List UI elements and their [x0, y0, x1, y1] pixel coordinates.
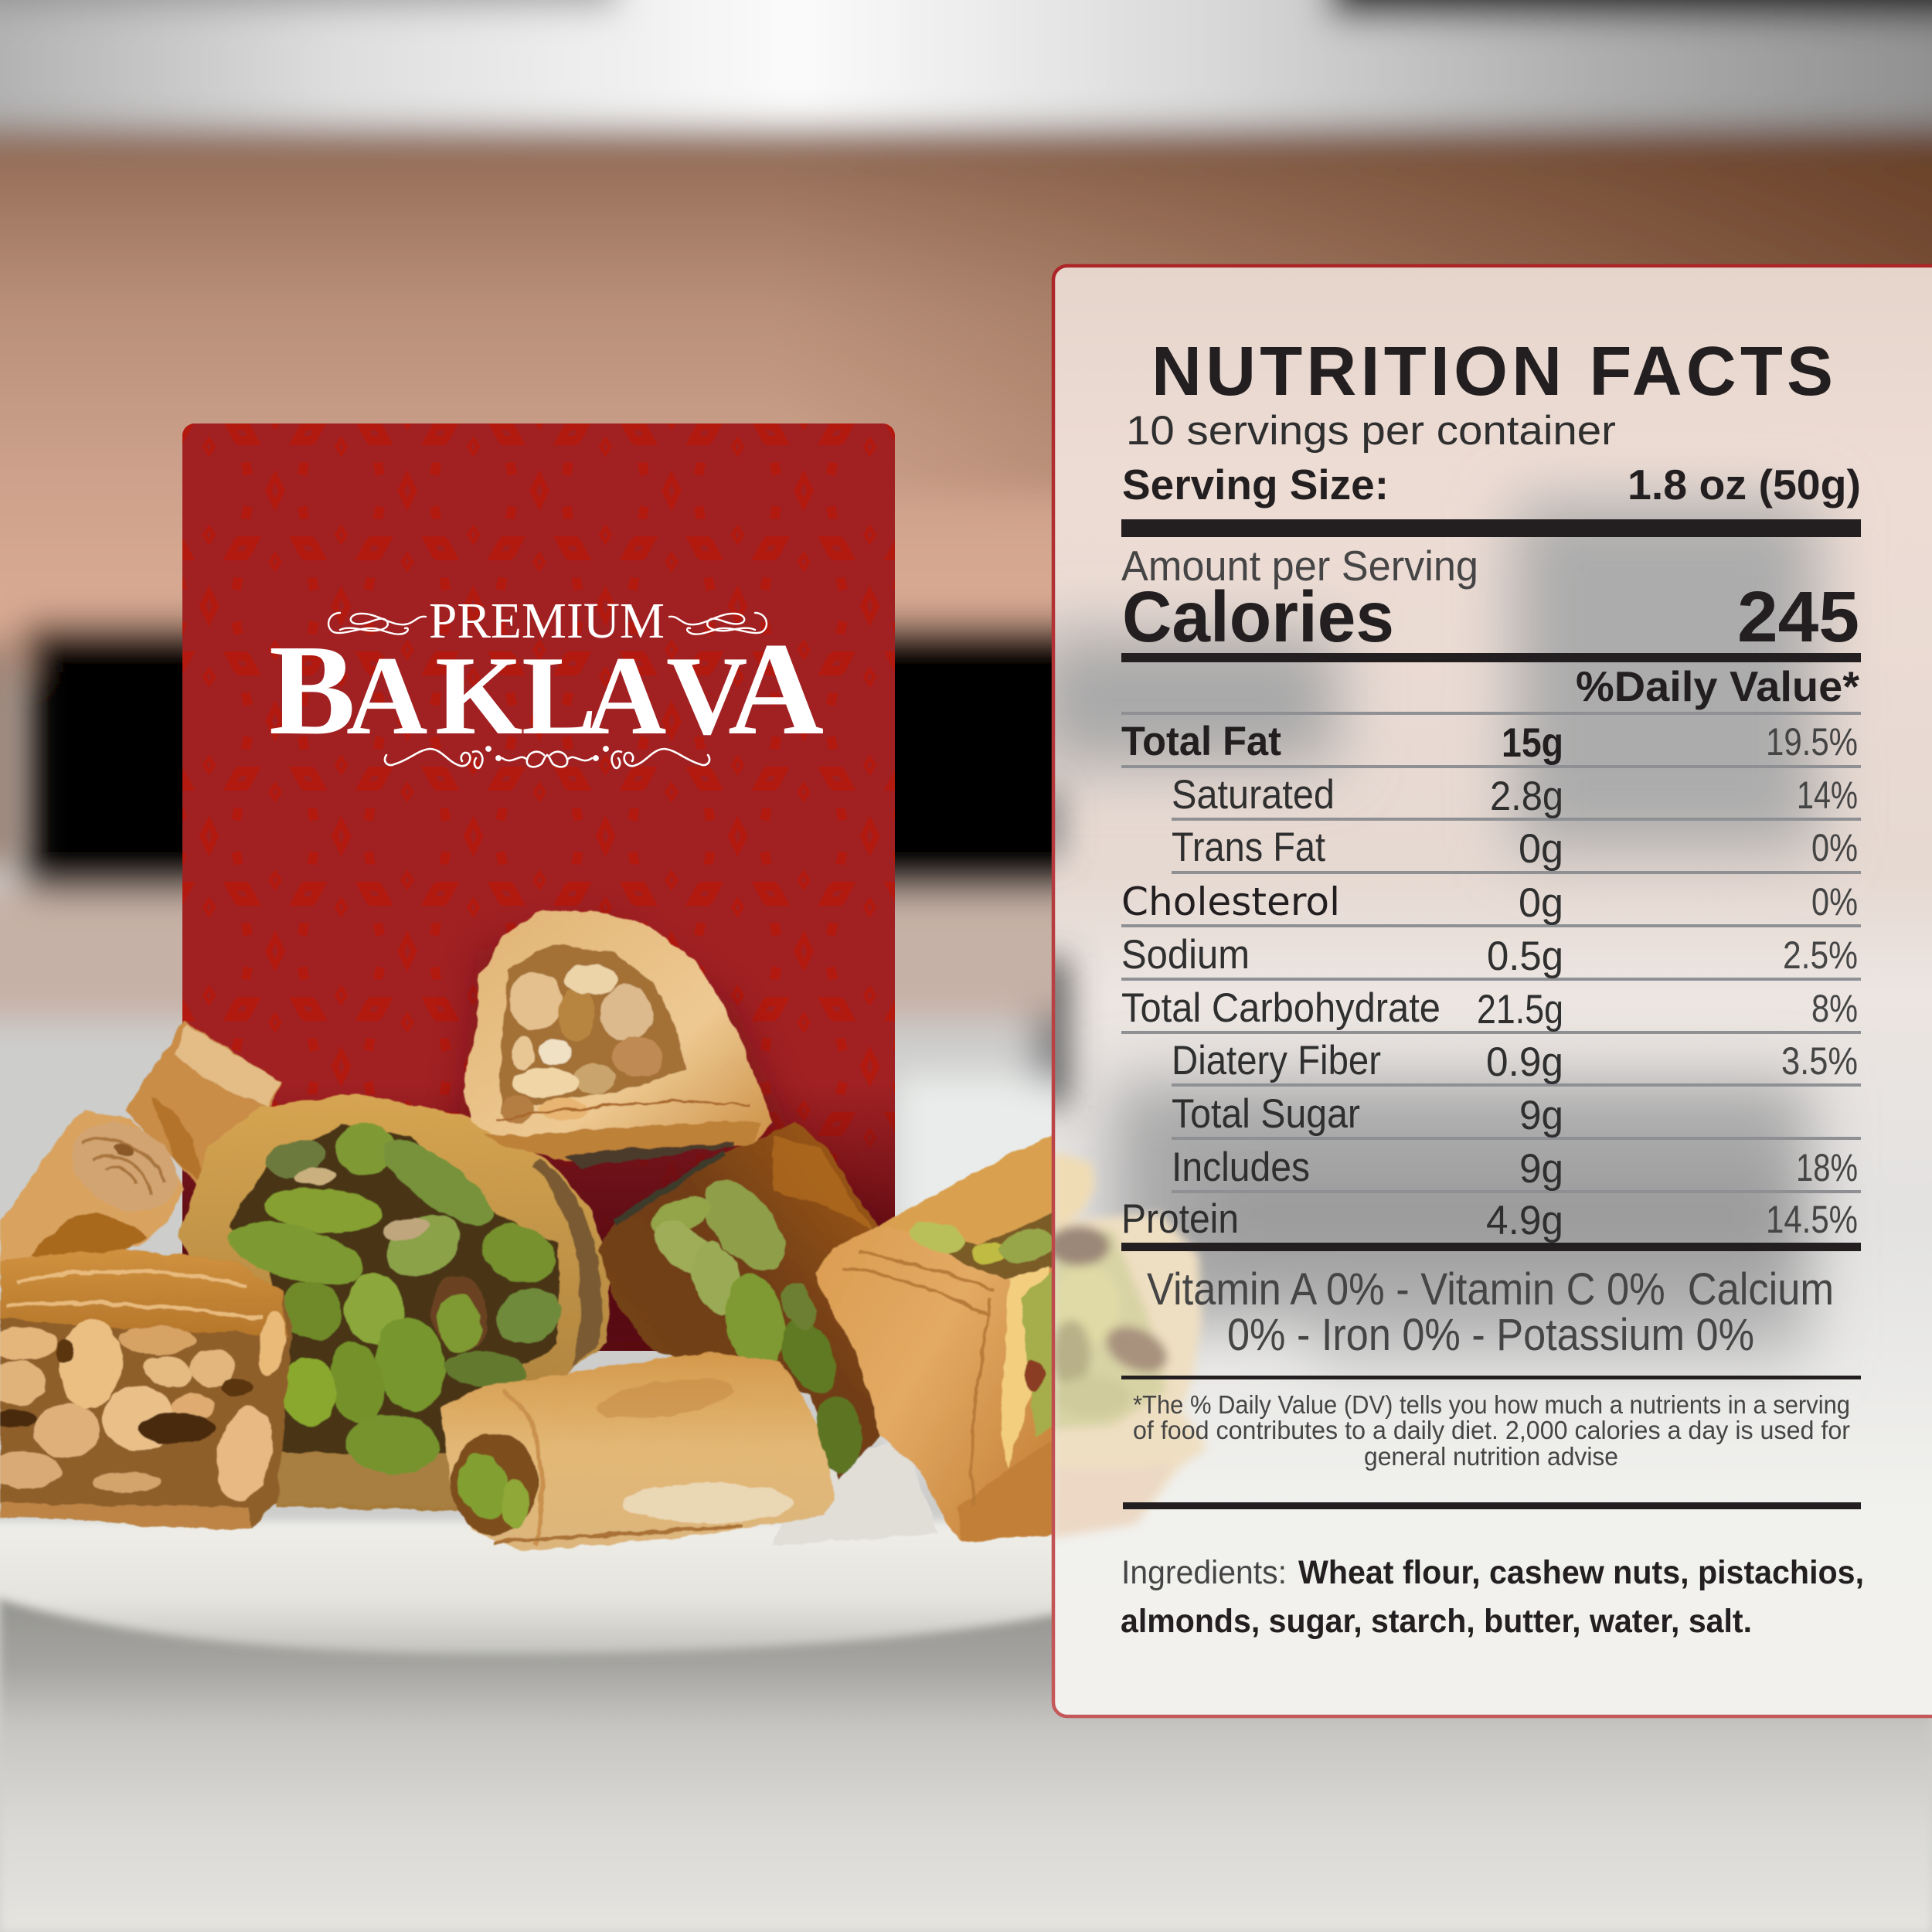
table end bar — [1121, 1243, 1861, 1251]
row: protein: 4.9g — [1486, 1198, 1563, 1243]
footnote: of food contributes to a daily diet. 2,000 calories a day is used for — [1133, 1416, 1850, 1444]
row: trans fat — [1172, 825, 1858, 872]
daily value header: %Daily Value* — [1576, 662, 1860, 710]
flourish right — [669, 613, 767, 634]
row: dietary fiber: 3.5% — [1781, 1039, 1858, 1083]
footnote: *The % Daily Value (DV) tells you how much a nutrients in a serving — [1133, 1390, 1850, 1419]
row: trans fat: Trans Fat — [1172, 825, 1325, 870]
serving size: 1.8 oz (50g) — [1628, 461, 1861, 509]
card title: PREMIUM — [429, 593, 665, 649]
calories — [1122, 577, 1859, 657]
row: total carbohydrate: 8% — [1811, 987, 1858, 1030]
calories divider — [1121, 653, 1861, 662]
calories: Calories — [1122, 577, 1394, 657]
vitamins divider — [1121, 1376, 1861, 1379]
row: saturated: Saturated — [1172, 772, 1335, 818]
pastry: cashew block — [0, 1250, 292, 1529]
row: total sugar: 9g — [1519, 1093, 1563, 1138]
calories: 245 — [1737, 577, 1859, 657]
row: sodium: Sodium — [1121, 932, 1250, 978]
thick divider — [1121, 519, 1861, 537]
row: saturated: 14% — [1797, 774, 1858, 817]
row: saturated: 2.8g — [1490, 774, 1563, 819]
row: trans fat: 0% — [1811, 826, 1858, 869]
panel border — [1053, 266, 1932, 1716]
serving size: Serving Size: — [1122, 461, 1389, 509]
vitamins text: Vitamin A 0% - Vitamin C 0% Calcium — [1147, 1264, 1834, 1315]
servings per container: 10 servings per container — [1126, 408, 1616, 454]
pastry: back roll — [124, 1021, 282, 1190]
row: dietary fiber — [1172, 1038, 1858, 1085]
row: saturated — [1172, 772, 1858, 819]
faded pastry behind glass — [1048, 1151, 1208, 1538]
card title: B — [269, 618, 355, 762]
row: includes: 9g — [1519, 1146, 1563, 1192]
amount per serving: Amount per Serving — [1121, 542, 1478, 590]
row: total fat — [1121, 719, 1858, 766]
baking paper — [773, 1437, 939, 1546]
row: total fat: Total Fat — [1121, 719, 1281, 764]
footnote: general nutrition advise — [1364, 1442, 1618, 1471]
card title — [269, 593, 824, 768]
row: includes: Includes — [1172, 1145, 1310, 1190]
row: total sugar: Total Sugar — [1172, 1091, 1360, 1137]
ingredients — [1121, 1554, 1864, 1640]
row: cholesterol: 0% — [1811, 880, 1858, 923]
row: includes: 18% — [1796, 1146, 1858, 1189]
ingredients: Ingredients: — [1121, 1554, 1287, 1591]
card title: A — [728, 616, 824, 763]
ornament under title — [385, 747, 709, 768]
pastry: cashew triangle on top — [462, 910, 772, 1165]
serving size — [1122, 461, 1861, 509]
pastry: large pistachio roll — [178, 1094, 611, 1511]
nutrition panel — [1036, 266, 1932, 1716]
row: total fat: 15g — [1502, 720, 1563, 766]
vitamins text — [1147, 1264, 1834, 1360]
frosted panel background — [1036, 266, 1932, 1716]
heading: nutrition facts: NUTRITION FACTS — [1151, 333, 1833, 410]
row: dietary fiber: Diatery Fiber — [1172, 1038, 1381, 1083]
row: cholesterol — [1121, 879, 1858, 926]
nutrient table — [1121, 712, 1861, 1243]
row: cholesterol: 0g — [1519, 880, 1563, 926]
red package card — [131, 423, 895, 1352]
ingredients: almonds, sugar, starch, butter, water, salt. — [1121, 1603, 1752, 1640]
flourish left — [328, 613, 426, 634]
pastry: dark pistachio slice — [598, 1122, 885, 1480]
row: includes — [1172, 1145, 1858, 1192]
row: total carbohydrate: Total Carbohydrate — [1121, 985, 1440, 1031]
row: protein — [1121, 1196, 1858, 1243]
baklava pile — [0, 910, 1059, 1551]
pastry: right triangle — [815, 1134, 1059, 1542]
ingredients: Wheat flour, cashew nuts, pistachios, — [1298, 1554, 1864, 1591]
row: total sugar — [1172, 1091, 1563, 1138]
row: cholesterol: Cholesterol — [1121, 879, 1340, 924]
row: dietary fiber: 0.9g — [1486, 1039, 1563, 1085]
pastry: front roll — [440, 1352, 835, 1551]
row: sodium — [1121, 932, 1858, 979]
row: protein: Protein — [1121, 1196, 1239, 1242]
row: sodium: 0.5g — [1487, 934, 1563, 979]
card title: AKLAV — [346, 633, 747, 758]
row: total carbohydrate — [1121, 985, 1858, 1032]
footnote — [1133, 1390, 1850, 1471]
row: protein: 14.5% — [1766, 1198, 1858, 1241]
pastry: left roll — [0, 1110, 185, 1262]
plate — [0, 1521, 1082, 1654]
row: sodium: 2.5% — [1783, 934, 1858, 977]
row: total carbohydrate: 21.5g — [1477, 987, 1563, 1032]
row: trans fat: 0g — [1519, 826, 1563, 872]
footnote divider — [1123, 1502, 1861, 1509]
vitamins text: 0% - Iron 0% - Potassium 0% — [1227, 1310, 1754, 1360]
row: total fat: 19.5% — [1766, 720, 1858, 764]
